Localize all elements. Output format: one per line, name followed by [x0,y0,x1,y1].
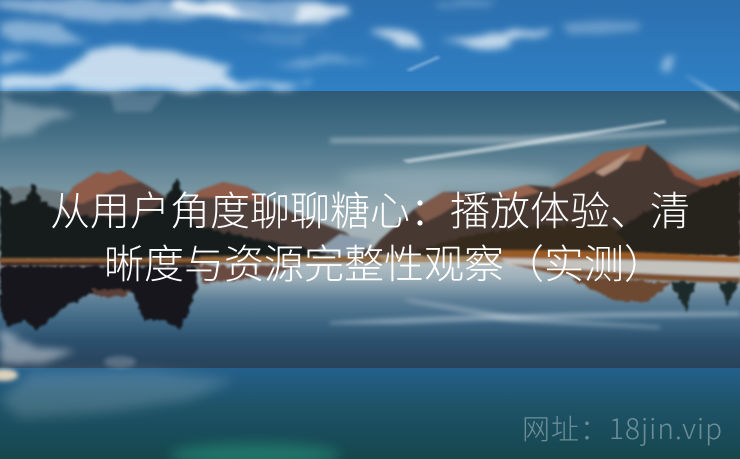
watermark: 网址：18jin.vip [522,408,723,448]
title [50,179,690,290]
reflected contrails in the water [0,298,740,368]
mountains [0,145,740,262]
shoreline and snow [0,250,740,283]
dark forest on the slopes [0,175,740,262]
clouds in the open sky [0,0,740,112]
title: 从用户角度聊聊糖心：播放体验、清 [50,179,690,237]
title: 晰度与资源完整性观察（实测） [104,232,664,290]
clouds and contrails inside the band [0,94,740,238]
clouds reflected in the lower water [0,369,235,418]
reflections of trees and mountains [0,266,738,330]
